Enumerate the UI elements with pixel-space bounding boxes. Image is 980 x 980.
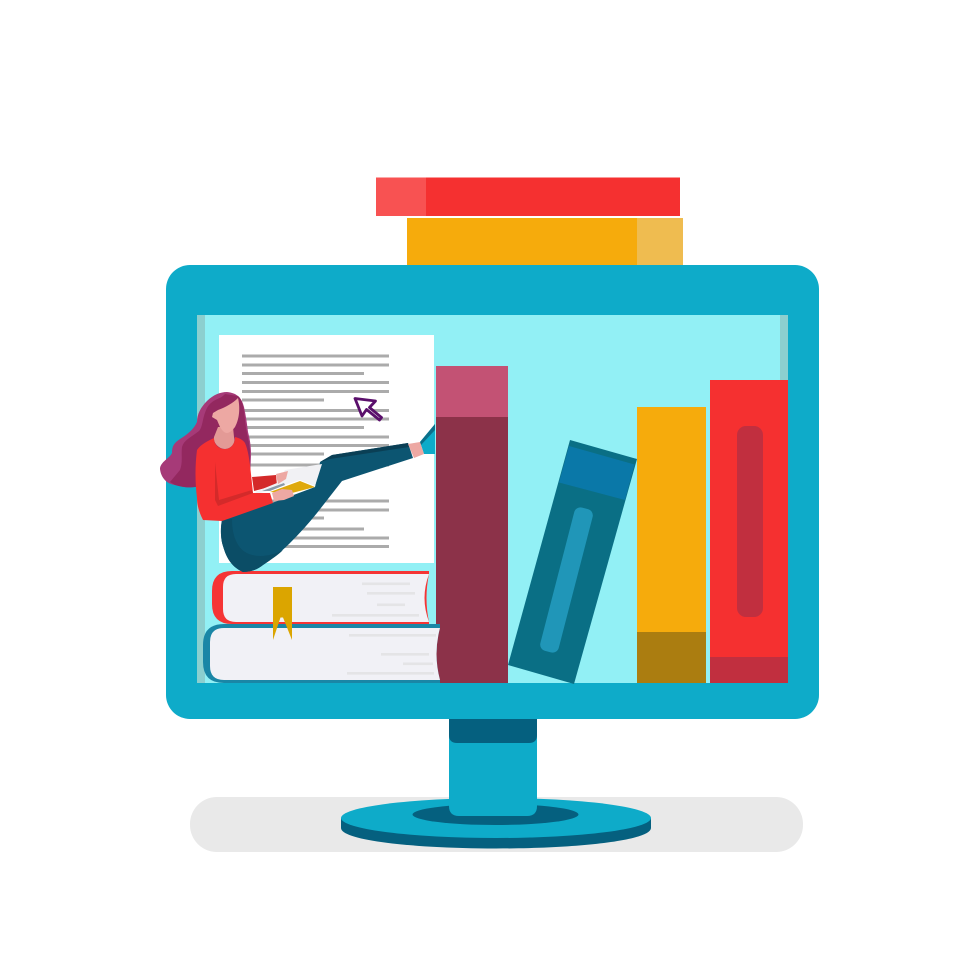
ground shadow [190, 797, 803, 852]
yellow book [637, 407, 706, 683]
hair [160, 392, 251, 487]
red book [710, 380, 788, 683]
face [212, 398, 239, 433]
sweater [196, 437, 273, 521]
monitor frame [166, 265, 819, 719]
near hand [272, 489, 294, 501]
stacked book: teal [203, 624, 440, 683]
open book [255, 464, 322, 494]
legs [221, 443, 413, 572]
shoe [420, 424, 435, 454]
upper leg shade [320, 443, 409, 462]
text lines [242, 354, 389, 548]
ankle [408, 442, 424, 458]
books on top of monitor [376, 178, 683, 266]
bookmark [273, 587, 292, 640]
icon: mouse cursor [355, 398, 382, 420]
far arm [252, 475, 277, 491]
stacked book: red [212, 571, 429, 624]
monitor stand neck [449, 715, 537, 816]
neck [214, 427, 234, 449]
document page [219, 335, 434, 563]
far hand [276, 471, 288, 484]
sleeve fold [215, 462, 253, 506]
tilted teal book [508, 440, 637, 684]
tall maroon book [436, 366, 508, 683]
woman reading [160, 392, 435, 572]
thigh shade [221, 519, 283, 572]
monitor stand base [341, 798, 651, 848]
monitor screen [197, 315, 788, 683]
hair shade [170, 394, 250, 487]
